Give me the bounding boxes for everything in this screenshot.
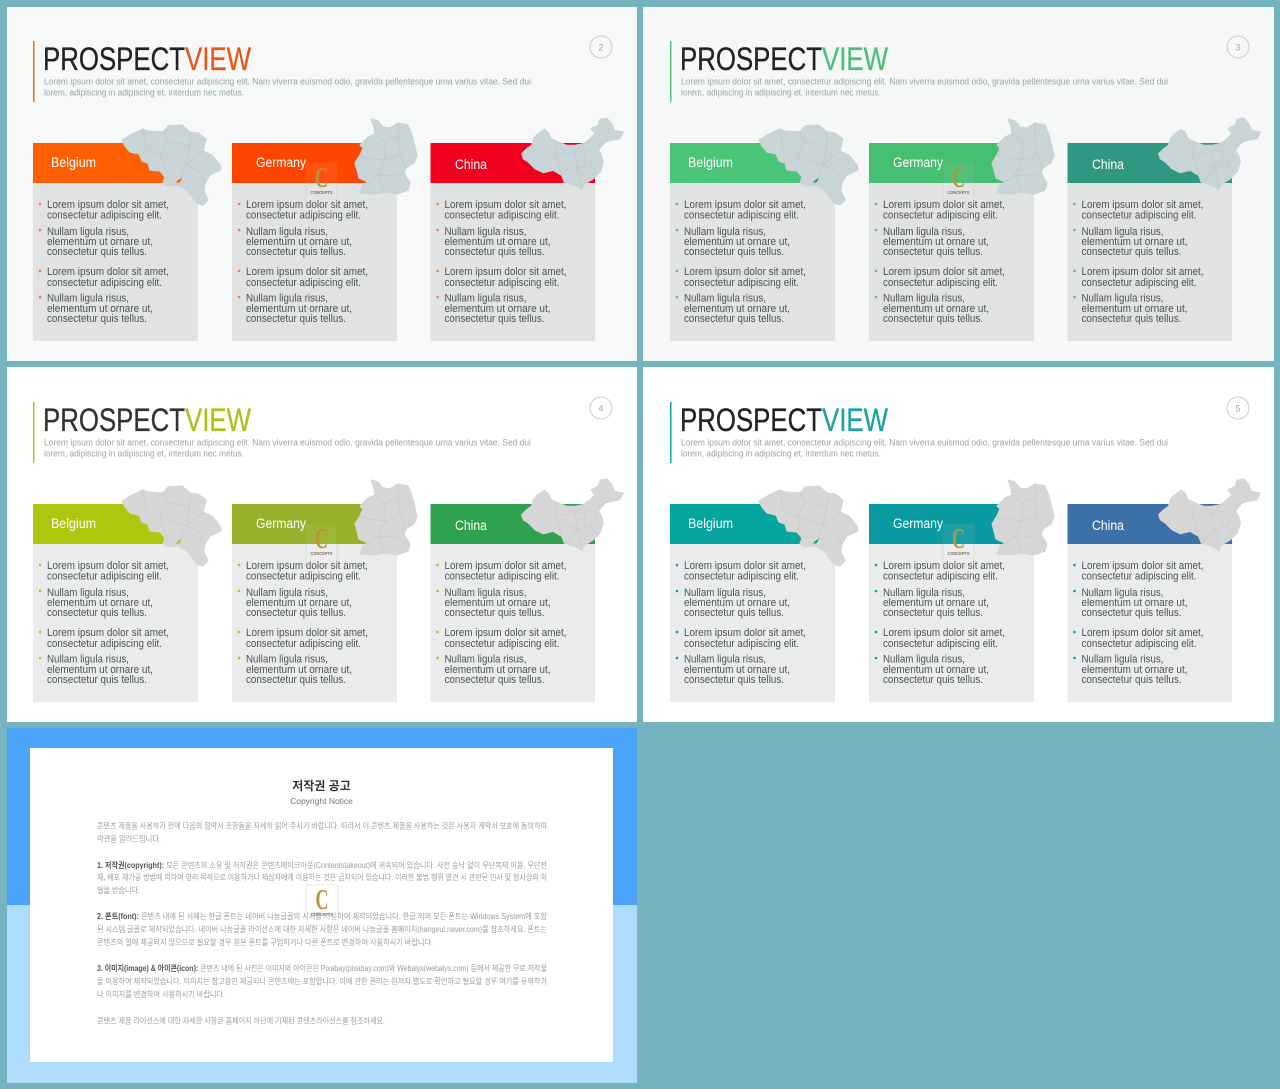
card: Germany: Lorem ipsum dolor sit amet, (883, 199, 1005, 211)
card: Belgium: elementum ut ornare ut, (684, 664, 790, 676)
card: Germany: consectetur adipiscing elit. (246, 570, 361, 582)
card: China: consectetur quis tellus. (444, 313, 544, 325)
card: Belgium: consectetur quis tellus. (684, 313, 784, 325)
accent bar (670, 402, 672, 463)
card: Belgium: consectetur adipiscing elit. (684, 209, 799, 221)
watermark logo: C (952, 163, 965, 194)
card: China: elementum ut ornare ut, (444, 236, 550, 248)
card: Germany: Lorem ipsum dolor sit amet, (246, 627, 368, 639)
subtitle text: lorem, adipiscing in adipiscing et, interdum nec metus. (44, 449, 244, 459)
subtitle text (44, 438, 531, 459)
card: Germany: consectetur quis tellus. (883, 674, 983, 686)
card: Germany: consectetur adipiscing elit. (246, 638, 361, 650)
text block: font: 콘텐츠의 일에 제공되지 않으므로 필요할 경우 원본 폰트를 구입하거나 다른 폰트로 변경하여 사용하시기 바랍니다. (97, 937, 433, 947)
card: China: consectetur quis tellus. (1082, 607, 1182, 619)
card: Germany: Nullam ligula risus, (246, 292, 328, 304)
panel: slide 2 orange (7, 7, 637, 361)
title: VIEW (185, 402, 252, 438)
card: Germany: Germany (256, 155, 306, 170)
subtitle text: Lorem ipsum dolor sit amet, consectetur adipiscing elit. Nam viverra euismod odio, gravida pellentesque urna varius vitae. Sed dui (681, 438, 1168, 448)
card: Belgium: Belgium (688, 155, 733, 170)
card: China: consectetur adipiscing elit. (1082, 638, 1196, 650)
card: Belgium: Nullam ligula risus, (47, 653, 129, 665)
card: Belgium: Nullam ligula risus, (684, 226, 766, 238)
subtitle text: lorem, adipiscing in adipiscing et, interdum nec metus. (681, 88, 881, 98)
card: Germany: consectetur adipiscing elit. (883, 638, 998, 650)
card: Germany: Germany (256, 516, 306, 531)
card: Germany: Lorem ipsum dolor sit amet, (246, 266, 368, 278)
card: Belgium: Belgium (51, 516, 96, 531)
card: Germany: Nullam ligula risus, (883, 653, 965, 665)
watermark logo: C (316, 885, 328, 916)
text block: image and icon (97, 963, 547, 999)
card: Germany: Lorem ipsum dolor sit amet, (246, 199, 368, 211)
card: China: elementum ut ornare ut, (444, 303, 550, 315)
card: China: elementum ut ornare ut, (1082, 597, 1188, 609)
card: China: consectetur adipiscing elit. (1082, 209, 1196, 221)
text block: intro (97, 820, 547, 844)
title: VIEW (822, 402, 889, 438)
card: China: Lorem ipsum dolor sit amet, (444, 627, 566, 639)
card: Germany: consectetur quis tellus. (883, 313, 983, 325)
card: Belgium (33, 486, 221, 702)
text block: intro: 약관을 알려드립니다. (97, 834, 161, 844)
card: Germany: elementum ut ornare ut, (883, 303, 989, 315)
card: Germany: consectetur quis tellus. (246, 246, 346, 258)
card: Germany (232, 119, 417, 341)
panel: copyright notice slide (7, 728, 637, 1083)
card: Belgium: elementum ut ornare ut, (684, 236, 790, 248)
card: Belgium: Nullam ligula risus, (684, 653, 766, 665)
card: China (1068, 479, 1260, 702)
subtitle text: lorem, adipiscing in adipiscing et, interdum nec metus. (681, 449, 881, 459)
card: Belgium: Lorem ipsum dolor sit amet, (684, 560, 806, 572)
subtitle text: Lorem ipsum dolor sit amet, consectetur adipiscing elit. Nam viverra euismod odio, gravida pellentesque urna varius vitae. Sed dui (44, 77, 531, 87)
card: Belgium (670, 486, 858, 702)
card: Germany: elementum ut ornare ut, (883, 236, 989, 248)
page number: 3 (1235, 42, 1241, 52)
card: China: China (1092, 518, 1124, 533)
title: PROSPECT (680, 41, 822, 77)
card: Germany: consectetur adipiscing elit. (883, 277, 998, 289)
card: Belgium: consectetur adipiscing elit. (684, 638, 799, 650)
card: China: Nullam ligula risus, (444, 226, 526, 238)
card: Germany (232, 480, 417, 702)
card: Belgium: Nullam ligula risus, (47, 292, 129, 304)
card: China: consectetur quis tellus. (444, 674, 544, 686)
card: China: Lorem ipsum dolor sit amet, (1082, 266, 1204, 278)
panel: slide 5 teal (643, 367, 1274, 722)
card: Belgium: elementum ut ornare ut, (684, 597, 790, 609)
text block: copyright: 재, 배포 재가공 방법에 의하여 영리 목적으로 이용하거나 제삼자에게 이용하는 것은 금지되어 있습니다. 이러한 불법 행위 발견 시 관련된 민사 및 형사상의 처 (97, 872, 547, 882)
card: China: Nullam ligula risus, (1082, 226, 1164, 238)
text block: intro: 콘텐츠 제품을 사용하기 전에 다음의 협약서 조항들을 자세히 읽어 주시기 바랍니다. 따라서 이 콘텐츠 제품을 사용하는 것은 사용자 계약서 보호에 동의하여 (97, 820, 547, 830)
card: China: Nullam ligula risus, (1082, 653, 1164, 665)
watermark logo: C (315, 524, 328, 555)
card: Germany: Lorem ipsum dolor sit amet, (883, 560, 1005, 572)
card: China: Nullam ligula risus, (1082, 292, 1164, 304)
page number (590, 36, 612, 58)
card: Belgium: consectetur quis tellus. (47, 607, 147, 619)
accent bar (670, 41, 672, 102)
page number: 5 (1235, 404, 1241, 414)
card: China: consectetur quis tellus. (1082, 674, 1182, 686)
card: Germany: Lorem ipsum dolor sit amet, (883, 266, 1005, 278)
card: China (430, 479, 623, 702)
title: VIEW (822, 41, 889, 77)
card: Belgium: Lorem ipsum dolor sit amet, (47, 627, 169, 639)
subtitle text (681, 438, 1168, 459)
card: Belgium: consectetur quis tellus. (47, 674, 147, 686)
card: Belgium (33, 125, 221, 341)
card: China: China (455, 157, 487, 172)
card: Germany (869, 119, 1054, 341)
card: China: Lorem ipsum dolor sit amet, (444, 560, 566, 572)
heading: copyright notice (290, 778, 353, 806)
card: Belgium: consectetur quis tellus. (47, 246, 147, 258)
text block: image and icon: 나 이미지를 변경하여 사용하시기 바랍니다. (97, 989, 225, 999)
accent bar (33, 402, 34, 463)
card: Belgium: Lorem ipsum dolor sit amet, (684, 627, 806, 639)
text block: copyright: 1. 저작권(copyright): 모든 콘텐츠의 소유 및 저작권은 콘텐츠메이크아웃(Contentstakeout)에 귀속되어 있습니다. 사전 승낙 없이 무단복제 이용, 무단전 (97, 860, 547, 870)
card: China: elementum ut ornare ut, (444, 664, 550, 676)
card: China: Lorem ipsum dolor sit amet, (1082, 627, 1204, 639)
card: Belgium: Nullam ligula risus, (684, 587, 766, 599)
card: Germany: Lorem ipsum dolor sit amet, (246, 560, 368, 572)
card: Germany: consectetur adipiscing elit. (883, 570, 998, 582)
card: China: elementum ut ornare ut, (1082, 664, 1188, 676)
watermark logo: CONCEPTS (948, 190, 970, 195)
card: Germany: consectetur adipiscing elit. (246, 277, 361, 289)
card: Germany: Nullam ligula risus, (246, 587, 328, 599)
card: Germany: consectetur adipiscing elit. (883, 209, 998, 221)
card: China (1068, 118, 1260, 341)
card: China (430, 118, 623, 341)
card: Belgium: Lorem ipsum dolor sit amet, (684, 199, 806, 211)
card: China: consectetur quis tellus. (444, 246, 544, 258)
text block: image and icon: 3. 이미지(image) & 아이콘(icon): 콘텐츠 내에 된 사진은 이미지와 아이콘은 Pixabay(pixabay.com)와 Webalys(webalys.com) 등에서 제공한 무료 저작물 (97, 963, 547, 973)
card: China: elementum ut ornare ut, (1082, 303, 1188, 315)
watermark logo (306, 163, 337, 205)
card: Germany: elementum ut ornare ut, (246, 303, 352, 315)
card: China: Nullam ligula risus, (444, 653, 526, 665)
card: Germany: elementum ut ornare ut, (883, 597, 989, 609)
card: Belgium: Lorem ipsum dolor sit amet, (684, 266, 806, 278)
heading: copyright notice: Copyright Notice (290, 796, 353, 806)
card: Belgium: elementum ut ornare ut, (47, 303, 153, 315)
card: China: consectetur quis tellus. (1082, 246, 1182, 258)
card: China: consectetur adipiscing elit. (1082, 570, 1196, 582)
subtitle text (44, 77, 531, 98)
watermark logo (306, 524, 337, 566)
card: Germany: consectetur quis tellus. (883, 607, 983, 619)
card: China: elementum ut ornare ut, (1082, 236, 1188, 248)
card: Germany: elementum ut ornare ut, (246, 664, 352, 676)
card: China: consectetur quis tellus. (444, 607, 544, 619)
card: China: consectetur adipiscing elit. (444, 570, 560, 582)
card: Germany: consectetur adipiscing elit. (246, 209, 361, 221)
card: Belgium (670, 125, 858, 341)
watermark logo (943, 163, 974, 205)
card: Belgium: consectetur adipiscing elit. (684, 277, 799, 289)
card: Belgium: Nullam ligula risus, (684, 292, 766, 304)
title: PROSPECT (43, 41, 185, 77)
watermark logo: CONCEPTS (311, 912, 333, 917)
card: Germany: consectetur quis tellus. (246, 674, 346, 686)
card: Belgium: consectetur adipiscing elit. (47, 638, 162, 650)
subtitle text (681, 77, 1168, 98)
card: Belgium: consectetur quis tellus. (684, 607, 784, 619)
card: Germany: elementum ut ornare ut, (246, 236, 352, 248)
accent bar (33, 41, 34, 102)
card: Germany: Nullam ligula risus, (246, 226, 328, 238)
card: Belgium: consectetur adipiscing elit. (47, 209, 162, 221)
card: Germany: Germany (893, 155, 943, 170)
text block: image and icon: 을 이용하여 제작되었습니다. 이미지는 참고용만 제공되니 콘텐츠에는 포함합니다. 이에 관한 권리는 원저자 별도로 확인하고 필요할 경우 여기를 유의하거 (97, 976, 547, 986)
title: PROSPECT (680, 402, 822, 438)
card: Belgium: consectetur adipiscing elit. (684, 570, 799, 582)
watermark logo: C (952, 524, 965, 555)
subtitle text: Lorem ipsum dolor sit amet, consectetur adipiscing elit. Nam viverra euismod odio, gravida pellentesque urna varius vitae. Sed dui (44, 438, 531, 448)
card: China: elementum ut ornare ut, (444, 597, 550, 609)
card: Germany: Nullam ligula risus, (883, 226, 965, 238)
page number (1227, 36, 1249, 58)
text block: copyright: 벌을 받습니다. (97, 885, 140, 895)
card: Belgium: consectetur quis tellus. (47, 313, 147, 325)
watermark logo: CONCEPTS (310, 190, 332, 195)
card: Germany: Nullam ligula risus, (246, 653, 328, 665)
page number (1227, 397, 1249, 419)
card: China: China (1092, 157, 1124, 172)
card: Germany: elementum ut ornare ut, (883, 664, 989, 676)
card: Belgium: elementum ut ornare ut, (47, 236, 153, 248)
text block: font: 2. 폰트(font): 콘텐츠 내에 된 서체는 한글 폰트는 네이버 나눔글꼴의 서체를 사용하여 제작되었습니다. 한글 외의 모든 폰트는 Windows System에 포함 (97, 911, 548, 921)
card: China: China (455, 518, 487, 533)
card: Germany: consectetur quis tellus. (246, 313, 346, 325)
card: Germany: Lorem ipsum dolor sit amet, (883, 627, 1005, 639)
card: Belgium: Lorem ipsum dolor sit amet, (47, 199, 169, 211)
page number: 4 (598, 404, 604, 414)
card: China: Lorem ipsum dolor sit amet, (444, 266, 566, 278)
card: China: Lorem ipsum dolor sit amet, (1082, 560, 1204, 572)
card: Belgium: Belgium (688, 516, 733, 531)
card: Belgium: consectetur quis tellus. (684, 246, 784, 258)
text block: copyright (97, 860, 547, 895)
card: China: consectetur adipiscing elit. (444, 277, 560, 289)
card: Belgium: consectetur adipiscing elit. (47, 277, 162, 289)
card: Belgium: consectetur quis tellus. (684, 674, 784, 686)
card: Germany: Nullam ligula risus, (883, 292, 965, 304)
card: China: Nullam ligula risus, (444, 292, 526, 304)
panel: slide 4 lime (7, 367, 637, 722)
text block: font: 된 시스템 글꼴로 제작되었습니다. 네이버 나눔글꼴 라이선스에 대한 자세한 사항은 네이버 나눔글꼴 홈페이지(hangeul.naver.com)를 참조하세요. 폰트는 (97, 924, 547, 934)
text block: license note: 콘텐츠 제품 라이선스에 대한 자세한 사항은 홈페이지 하단에 기재된 콘텐츠라이선스를 참조하세요. (97, 1016, 385, 1026)
card: Belgium: Belgium (51, 155, 96, 170)
card: Belgium: Lorem ipsum dolor sit amet, (47, 266, 169, 278)
card: China: consectetur adipiscing elit. (1082, 277, 1196, 289)
text block: font (97, 911, 548, 947)
card: China: consectetur adipiscing elit. (444, 638, 560, 650)
page number: 2 (598, 42, 604, 52)
card: Germany: Germany (893, 516, 943, 531)
watermark logo: C (315, 163, 328, 194)
card: Germany: consectetur quis tellus. (883, 246, 983, 258)
card: Germany: consectetur quis tellus. (246, 607, 346, 619)
card: Belgium: elementum ut ornare ut, (47, 664, 153, 676)
watermark logo (943, 524, 974, 566)
heading: copyright notice: 저작권 공고 (292, 778, 351, 793)
card: Belgium: Nullam ligula risus, (47, 226, 129, 238)
card: Belgium: elementum ut ornare ut, (47, 597, 153, 609)
card: Germany (869, 480, 1054, 702)
card: China: consectetur adipiscing elit. (444, 209, 560, 221)
card: Belgium: elementum ut ornare ut, (684, 303, 790, 315)
title: PROSPECT (43, 402, 185, 438)
subtitle text: Lorem ipsum dolor sit amet, consectetur adipiscing elit. Nam viverra euismod odio, gravida pellentesque urna varius vitae. Sed dui (681, 77, 1168, 87)
page number (590, 397, 612, 419)
card: Belgium: Nullam ligula risus, (47, 587, 129, 599)
panel: slide 3 green (643, 7, 1274, 361)
watermark logo: CONCEPTS (948, 551, 970, 556)
title: VIEW (185, 41, 252, 77)
subtitle text: lorem, adipiscing in adipiscing et, interdum nec metus. (44, 88, 244, 98)
card: China: consectetur quis tellus. (1082, 313, 1182, 325)
watermark logo: CONCEPTS (310, 551, 332, 556)
card: Germany: Nullam ligula risus, (883, 587, 965, 599)
card: Belgium: Lorem ipsum dolor sit amet, (47, 560, 169, 572)
card: China: Lorem ipsum dolor sit amet, (1082, 199, 1204, 211)
card: China: Nullam ligula risus, (1082, 587, 1164, 599)
card: Germany: elementum ut ornare ut, (246, 597, 352, 609)
watermark logo (306, 885, 338, 925)
card: China: Lorem ipsum dolor sit amet, (444, 199, 566, 211)
card: Belgium: consectetur adipiscing elit. (47, 570, 162, 582)
card: China: Nullam ligula risus, (444, 587, 526, 599)
